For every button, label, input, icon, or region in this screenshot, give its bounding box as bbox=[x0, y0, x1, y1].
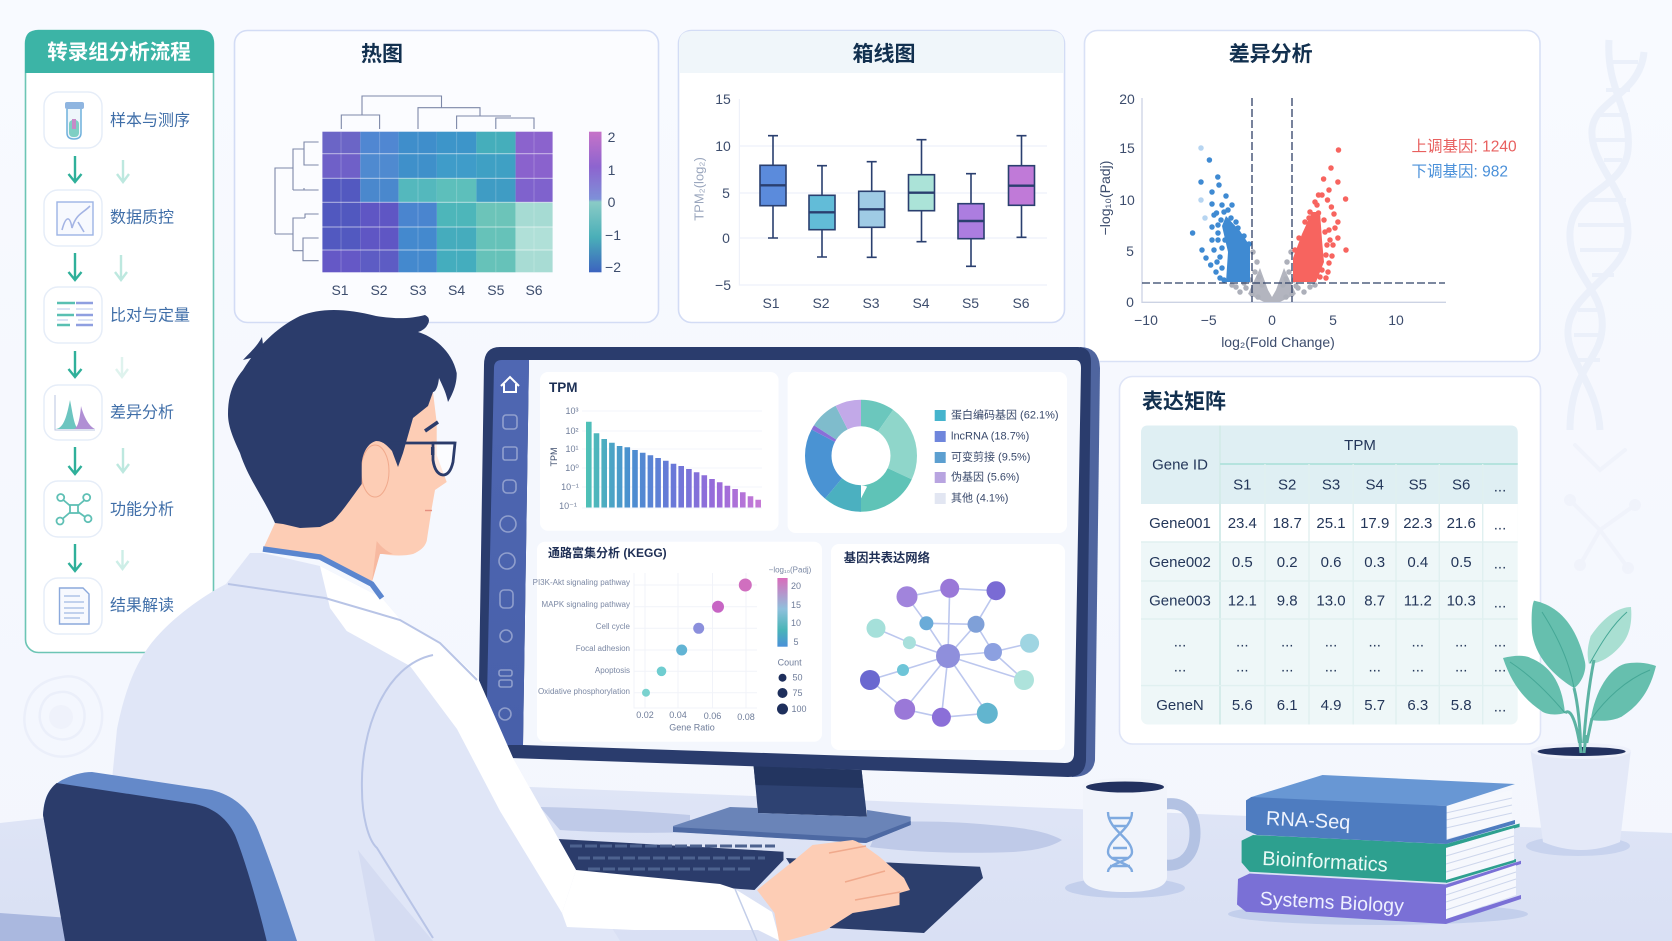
matrix table bbox=[1141, 426, 1518, 724]
dashboard card: biotype donut bbox=[788, 372, 1067, 533]
donut legend: lncRNA (18.7%) bbox=[951, 431, 1029, 443]
box plot sample labels: S3 bbox=[862, 295, 880, 311]
count legend: 100 bbox=[791, 704, 807, 714]
volcano axes bbox=[1097, 91, 1446, 350]
TPM card title: TPM bbox=[549, 380, 578, 395]
dashboard card: TPM bars: 10⁻¹ bbox=[561, 482, 579, 492]
dashboard card: KEGG enrichment bbox=[533, 542, 822, 742]
box plot sample labels bbox=[762, 295, 1030, 311]
monitor screen bbox=[500, 360, 1081, 763]
heatmap colour scale: 1 bbox=[608, 162, 616, 178]
ratio axis: 0.02 bbox=[636, 710, 654, 720]
arrow bbox=[68, 156, 82, 182]
down-regulated count: 下调基因: 982 bbox=[1412, 162, 1508, 180]
heatmap sample labels: S1 bbox=[331, 282, 349, 298]
matrix table: 4.9 bbox=[1321, 697, 1341, 714]
heatmap sample labels: S5 bbox=[487, 282, 505, 298]
box plot sample labels: S2 bbox=[812, 295, 830, 311]
KEGG colour scale: 20 bbox=[791, 581, 801, 591]
matrix table: ... bbox=[1281, 658, 1293, 676]
sidebar title: 转录组分析流程 bbox=[47, 41, 191, 64]
dashboard navigation rail bbox=[486, 360, 529, 745]
matrix table: 6.1 bbox=[1277, 697, 1298, 714]
donut legend: 伪基因 (5.6%) bbox=[951, 471, 1019, 484]
heatmap sample labels: S3 bbox=[409, 282, 427, 298]
mouth bbox=[425, 510, 432, 512]
matrix table: ... bbox=[1494, 698, 1506, 716]
icon: DNA on mug bbox=[1108, 812, 1132, 872]
decoration: cell bbox=[24, 676, 102, 757]
matrix table: ... bbox=[1494, 478, 1506, 496]
heatmap sample labels: S2 bbox=[370, 282, 388, 298]
matrix table: 11.2 bbox=[1404, 592, 1432, 610]
hair tuft bbox=[243, 337, 264, 360]
donut legend: 蛋白编码基因 (62.1%) bbox=[951, 408, 1059, 422]
left dendrogram bbox=[275, 142, 319, 261]
person: lab coat bbox=[111, 553, 780, 941]
pathway labels: MAPK signaling pathway bbox=[542, 600, 630, 609]
matrix table: 5.6 bbox=[1232, 697, 1253, 714]
KEGG colour scale: −log₁₀(Padj) bbox=[769, 566, 812, 574]
heatmap colour scale: −1 bbox=[605, 227, 621, 243]
dashboard card: TPM bars: 10⁻¹ bbox=[559, 501, 577, 511]
step 3: alignment and quantification: 比对与定量 bbox=[110, 306, 190, 324]
matrix table: ... bbox=[1455, 634, 1467, 650]
panel: box plot bbox=[678, 30, 1064, 322]
coat highlight bbox=[320, 566, 576, 913]
matrix table: 0.5 bbox=[1232, 554, 1253, 571]
matrix table: 5.8 bbox=[1451, 697, 1472, 714]
matrix table: ... bbox=[1368, 658, 1381, 676]
book: Systems Biology: Systems Biology bbox=[1259, 888, 1405, 918]
box plot title: 箱线图 bbox=[852, 43, 916, 66]
step 6: result interpretation: 结果解读 bbox=[110, 596, 174, 614]
pathway labels bbox=[533, 578, 631, 696]
box plot boxes bbox=[760, 136, 1034, 266]
count legend: Count bbox=[778, 658, 802, 668]
book: RNA-Seq bbox=[1246, 775, 1515, 844]
matrix table: GeneN bbox=[1156, 697, 1204, 714]
matrix table: 0.6 bbox=[1321, 554, 1341, 571]
book: Bioinformatics bbox=[1242, 824, 1520, 883]
matrix table: S2 bbox=[1278, 476, 1296, 494]
matrix table: 8.7 bbox=[1364, 592, 1385, 610]
box plot sample labels: S1 bbox=[762, 295, 780, 311]
donut chart bbox=[818, 413, 904, 498]
donut legend bbox=[935, 408, 1059, 505]
book: RNA-Seq: RNA-Seq bbox=[1265, 808, 1351, 834]
ear bbox=[361, 445, 389, 497]
matrix table: ... bbox=[1494, 556, 1506, 572]
leaves bbox=[1503, 601, 1656, 753]
matrix table: ... bbox=[1494, 516, 1506, 534]
volcano axes: log₂(Fold Change) bbox=[1221, 334, 1335, 350]
step 3: alignment and quantification bbox=[44, 287, 190, 343]
down-regulated genes bbox=[1193, 148, 1250, 282]
dashboard card: TPM bars bbox=[540, 372, 778, 531]
up-regulated genes bbox=[1293, 150, 1346, 282]
donut legend: 其他 (4.1%) bbox=[951, 492, 1008, 505]
person: neck and face bbox=[263, 392, 447, 598]
network edges bbox=[870, 588, 1030, 717]
matrix table: TPM bbox=[1344, 437, 1376, 454]
matrix table: ... bbox=[1494, 634, 1506, 650]
ratio axis: 0.06 bbox=[704, 711, 721, 721]
faded arrow bbox=[116, 550, 128, 569]
person: hand on mouse bbox=[757, 840, 910, 941]
book: Bioinformatics: Bioinformatics bbox=[1262, 848, 1388, 876]
matrix table: 25.1 bbox=[1316, 515, 1346, 532]
non-significant genes bbox=[1232, 252, 1315, 302]
book: Systems Biology bbox=[1237, 861, 1521, 924]
ratio axis: Gene Ratio bbox=[669, 723, 715, 733]
enrichment dots bbox=[642, 578, 752, 697]
person: hair bbox=[228, 310, 457, 528]
matrix table: ... bbox=[1174, 634, 1186, 650]
pathway labels: Oxidative phosphorylation bbox=[538, 687, 630, 696]
volcano axes: 20 bbox=[1119, 91, 1135, 107]
matrix table: ... bbox=[1325, 658, 1337, 676]
matrix table: S4 bbox=[1366, 476, 1384, 494]
heatmap colour scale bbox=[589, 129, 621, 275]
monitor side edge bbox=[1060, 347, 1100, 777]
faded arrow bbox=[117, 160, 129, 182]
faded arrow bbox=[116, 357, 128, 377]
KEGG colour scale: 15 bbox=[791, 600, 801, 610]
dashboard card: TPM bars: TPM bbox=[549, 448, 559, 466]
matrix title: 表达矩阵 bbox=[1142, 390, 1226, 414]
matrix table: ... bbox=[1412, 658, 1424, 676]
step 5: functional analysis: 功能分析 bbox=[110, 500, 174, 518]
matrix table: 0.2 bbox=[1277, 554, 1298, 571]
step 6: result interpretation bbox=[44, 578, 174, 634]
panel: heatmap bbox=[234, 30, 658, 322]
heatmap sample labels: S6 bbox=[525, 282, 543, 298]
ratio axis: 0.04 bbox=[669, 710, 687, 720]
ratio axis bbox=[636, 710, 755, 733]
KEGG title: 通路富集分析 (KEGG) bbox=[548, 545, 667, 560]
matrix table: ... bbox=[1368, 634, 1381, 650]
matrix table: ... bbox=[1174, 658, 1186, 676]
monitor bezel bbox=[478, 347, 1091, 777]
monitor shadow on desk bbox=[540, 807, 1062, 853]
pathway labels: Apoptosis bbox=[595, 666, 630, 675]
matrix table: ... bbox=[1281, 634, 1293, 650]
matrix table: 18.7 bbox=[1273, 515, 1302, 532]
dashboard card: co-expression network bbox=[831, 544, 1065, 750]
matrix table: ... bbox=[1494, 658, 1506, 676]
volcano axes: 0 bbox=[1126, 294, 1134, 310]
decoration: molecule network bbox=[1566, 445, 1639, 572]
step 2: quality control: 数据质控 bbox=[110, 208, 174, 226]
ratio axis: 0.08 bbox=[737, 712, 755, 722]
matrix table: ... bbox=[1412, 634, 1424, 650]
dashboard card: TPM bars: 10¹ bbox=[565, 444, 579, 454]
dashboard card: TPM bars: 10³ bbox=[565, 406, 579, 416]
matrix table: 0.3 bbox=[1364, 554, 1385, 571]
heatmap colour scale: 0 bbox=[608, 194, 616, 210]
volcano axes: 5 bbox=[1126, 243, 1134, 259]
volcano axes: −5 bbox=[1201, 312, 1217, 328]
box plot axes: −5 bbox=[715, 277, 731, 293]
step 4: differential analysis bbox=[44, 385, 174, 440]
matrix table: 23.4 bbox=[1228, 515, 1257, 532]
potted plant bbox=[1503, 601, 1656, 856]
step 5: functional analysis bbox=[44, 481, 174, 537]
network title: 基因共表达网络 bbox=[844, 550, 930, 565]
sidebar header bbox=[25, 30, 214, 73]
box plot axes: TPM₂(log₂) bbox=[692, 157, 706, 221]
arrow bbox=[68, 351, 82, 377]
box plot sample labels: S4 bbox=[912, 295, 930, 311]
person: glasses bbox=[388, 422, 455, 475]
office chair bbox=[43, 772, 297, 941]
heatmap sample labels bbox=[331, 282, 543, 298]
step 1: sample and sequencing bbox=[44, 92, 190, 148]
pathway labels: Focal adhesion bbox=[576, 644, 630, 653]
network nodes bbox=[860, 579, 1039, 727]
matrix table: 0.4 bbox=[1407, 554, 1428, 571]
TPM bars bbox=[586, 422, 761, 508]
stack of books bbox=[1228, 775, 1528, 925]
dashboard card: TPM bars: 10² bbox=[565, 426, 579, 436]
box plot axes: 5 bbox=[722, 185, 730, 201]
faded arrow bbox=[117, 448, 129, 472]
matrix table: ... bbox=[1236, 658, 1249, 676]
heatmap colour scale: −2 bbox=[605, 259, 621, 275]
box plot sample labels: S5 bbox=[962, 295, 979, 311]
KEGG colour scale: 10 bbox=[791, 618, 801, 628]
step 2: quality control bbox=[44, 190, 174, 246]
step 1: sample and sequencing: 样本与测序 bbox=[110, 112, 190, 130]
matrix table: Gene002 bbox=[1149, 554, 1211, 571]
matrix table: 10.3 bbox=[1447, 592, 1476, 610]
panel: pipeline sidebar bbox=[25, 30, 214, 652]
icon: home bbox=[501, 377, 519, 392]
panel: expression matrix bbox=[1120, 376, 1540, 744]
volcano axes: −10 bbox=[1134, 312, 1158, 328]
matrix table: 6.3 bbox=[1407, 697, 1428, 714]
matrix table: 17.9 bbox=[1360, 515, 1389, 532]
volcano axes: 15 bbox=[1119, 140, 1135, 156]
rail icons bbox=[499, 415, 517, 720]
shirt collar bbox=[263, 549, 382, 598]
coat seams bbox=[228, 584, 477, 938]
matrix table: Gene003 bbox=[1149, 592, 1211, 610]
desk surface bbox=[0, 787, 1672, 941]
box plot axes bbox=[692, 91, 1047, 293]
box plot sample labels: S6 bbox=[1012, 295, 1030, 311]
volcano axes: 0 bbox=[1268, 312, 1276, 328]
monitor stand bbox=[673, 766, 911, 843]
coffee mug bbox=[1065, 778, 1195, 898]
matrix table: S6 bbox=[1452, 476, 1470, 494]
volcano axes: 10 bbox=[1388, 312, 1404, 328]
panel: volcano plot bbox=[1084, 30, 1540, 362]
pathway labels: PI3K-Akt signaling pathway bbox=[533, 578, 630, 587]
faded arrow bbox=[115, 255, 127, 280]
count legend bbox=[777, 658, 807, 714]
volcano title: 差异分析 bbox=[1229, 43, 1313, 66]
matrix table: Gene001 bbox=[1149, 515, 1211, 532]
matrix table: ... bbox=[1455, 658, 1467, 676]
box plot axes: 10 bbox=[715, 138, 731, 154]
matrix table: 5.7 bbox=[1364, 697, 1385, 714]
dashboard card: TPM bars: 10⁰ bbox=[565, 463, 579, 473]
matrix table: 12.1 bbox=[1228, 592, 1257, 610]
count legend: 75 bbox=[792, 688, 803, 698]
heatmap colour scale: 2 bbox=[608, 129, 616, 145]
volcano axes: 5 bbox=[1329, 312, 1337, 328]
volcano axes: −log₁₀(Padj) bbox=[1097, 161, 1113, 235]
matrix table: 0.5 bbox=[1451, 554, 1472, 571]
matrix table: 13.0 bbox=[1316, 592, 1346, 610]
keyboard bbox=[558, 839, 784, 890]
matrix table: ... bbox=[1325, 634, 1337, 650]
decoration: DNA helix bbox=[1568, 40, 1644, 430]
pot bbox=[1530, 751, 1631, 850]
forearm sleeve bbox=[562, 870, 780, 941]
matrix table: ... bbox=[1236, 634, 1249, 650]
top dendrogram bbox=[341, 96, 534, 129]
matrix table: S1 bbox=[1233, 476, 1251, 494]
KEGG colour scale: 5 bbox=[793, 637, 799, 647]
step 4: differential analysis: 差异分析 bbox=[110, 404, 174, 422]
donut legend: 可变剪接 (9.5%) bbox=[951, 449, 1030, 463]
monitor bbox=[478, 347, 1100, 777]
coat sleeve shade bbox=[358, 850, 433, 941]
volcano thresholds bbox=[1142, 98, 1445, 302]
up-regulated count: 上调基因: 1240 bbox=[1412, 138, 1517, 156]
arrow bbox=[68, 253, 82, 280]
heatmap title: 热图 bbox=[361, 43, 403, 66]
matrix table: 9.8 bbox=[1277, 592, 1298, 610]
matrix table: 21.6 bbox=[1447, 515, 1476, 532]
arrow bbox=[68, 447, 82, 474]
arrow bbox=[68, 544, 82, 571]
box plot axes: 0 bbox=[722, 230, 730, 246]
pathway labels: Cell cycle bbox=[596, 622, 631, 631]
matrix table: S5 bbox=[1409, 476, 1427, 494]
matrix table: 22.3 bbox=[1403, 515, 1432, 532]
KEGG colour scale bbox=[769, 566, 812, 647]
heatmap sample labels: S4 bbox=[448, 282, 465, 298]
matrix table: ... bbox=[1494, 594, 1506, 612]
volcano axes: 10 bbox=[1119, 192, 1135, 208]
desk corner shade bbox=[0, 913, 70, 941]
heatmap cells bbox=[322, 132, 553, 272]
matrix table: Gene ID bbox=[1152, 456, 1208, 474]
mouse pad bbox=[786, 858, 983, 933]
box plot axes: 15 bbox=[715, 91, 731, 107]
matrix table: S3 bbox=[1322, 476, 1340, 494]
count legend: 50 bbox=[792, 673, 803, 683]
